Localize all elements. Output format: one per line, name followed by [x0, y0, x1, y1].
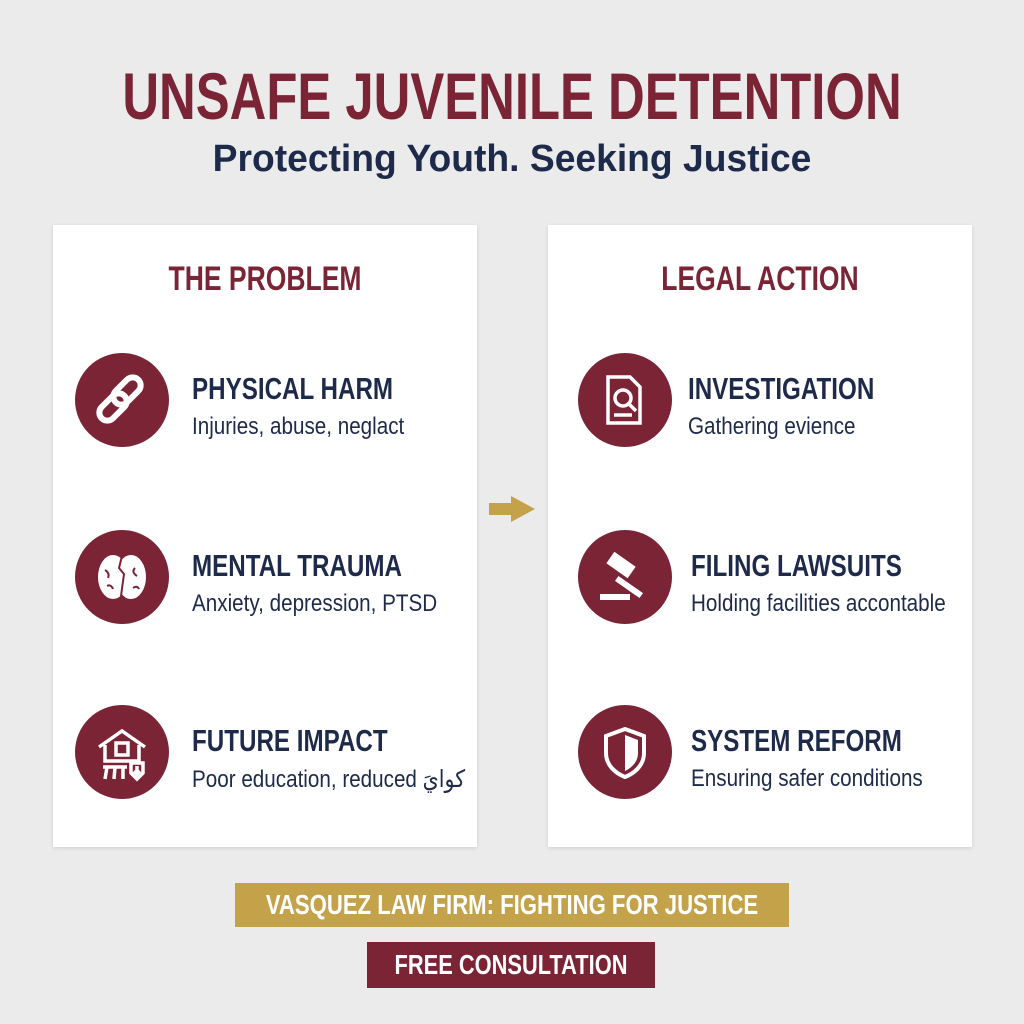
banner: free consultation: FREE CONSULTATION: [395, 949, 627, 980]
item: physical harm: Injuries, abuse, neglact: [192, 413, 404, 440]
item: future impact: [75, 705, 466, 799]
icon: document magnifier: [578, 353, 672, 447]
icon: shield: [578, 705, 672, 799]
arrow: [489, 496, 535, 522]
item: future impact: FUTURE IMPACT: [192, 723, 388, 758]
text: Protecting Youth. Seeking Justice: [213, 138, 811, 180]
item: filing lawsuits: FILING LAWSUITS: [691, 548, 902, 583]
banner: firm name: [235, 883, 789, 927]
item: system reform: SYSTEM REFORM: [691, 723, 902, 758]
icon: brain: [75, 530, 169, 624]
item: filing lawsuits: [578, 530, 946, 624]
item: physical harm: PHYSICAL HARM: [192, 371, 393, 406]
icon: house: [75, 705, 169, 799]
banner: firm name: VASQUEZ LAW FIRM: FIGHTING FOR JUSTICE: [266, 889, 758, 920]
text: UNSAFE JUVENILE DETENTION: [122, 59, 902, 133]
item: mental trauma: [75, 530, 437, 624]
panel: legal action: [548, 225, 972, 847]
item: mental trauma: Anxiety, depression, PTSD: [192, 590, 437, 617]
item: future impact: Poor education, reduced كوايَ: [192, 766, 465, 793]
item: system reform: [578, 705, 923, 799]
item: physical harm: [75, 353, 404, 447]
icon: gavel: [578, 530, 672, 624]
panel: the problem: THE PROBLEM: [168, 260, 362, 298]
item: filing lawsuits: Holding facilities accontable: [691, 590, 946, 617]
panel: legal action: LEGAL ACTION: [661, 260, 859, 298]
icon: chain link: [75, 353, 169, 447]
item: system reform: Ensuring safer conditions: [691, 765, 923, 792]
item: mental trauma: MENTAL TRAUMA: [192, 548, 402, 583]
item: investigation: [578, 353, 874, 447]
banner: free consultation: [367, 942, 655, 988]
item: investigation: Gathering evience: [688, 413, 856, 440]
item: investigation: INVESTIGATION: [688, 371, 874, 406]
panel: the problem: [53, 225, 477, 847]
